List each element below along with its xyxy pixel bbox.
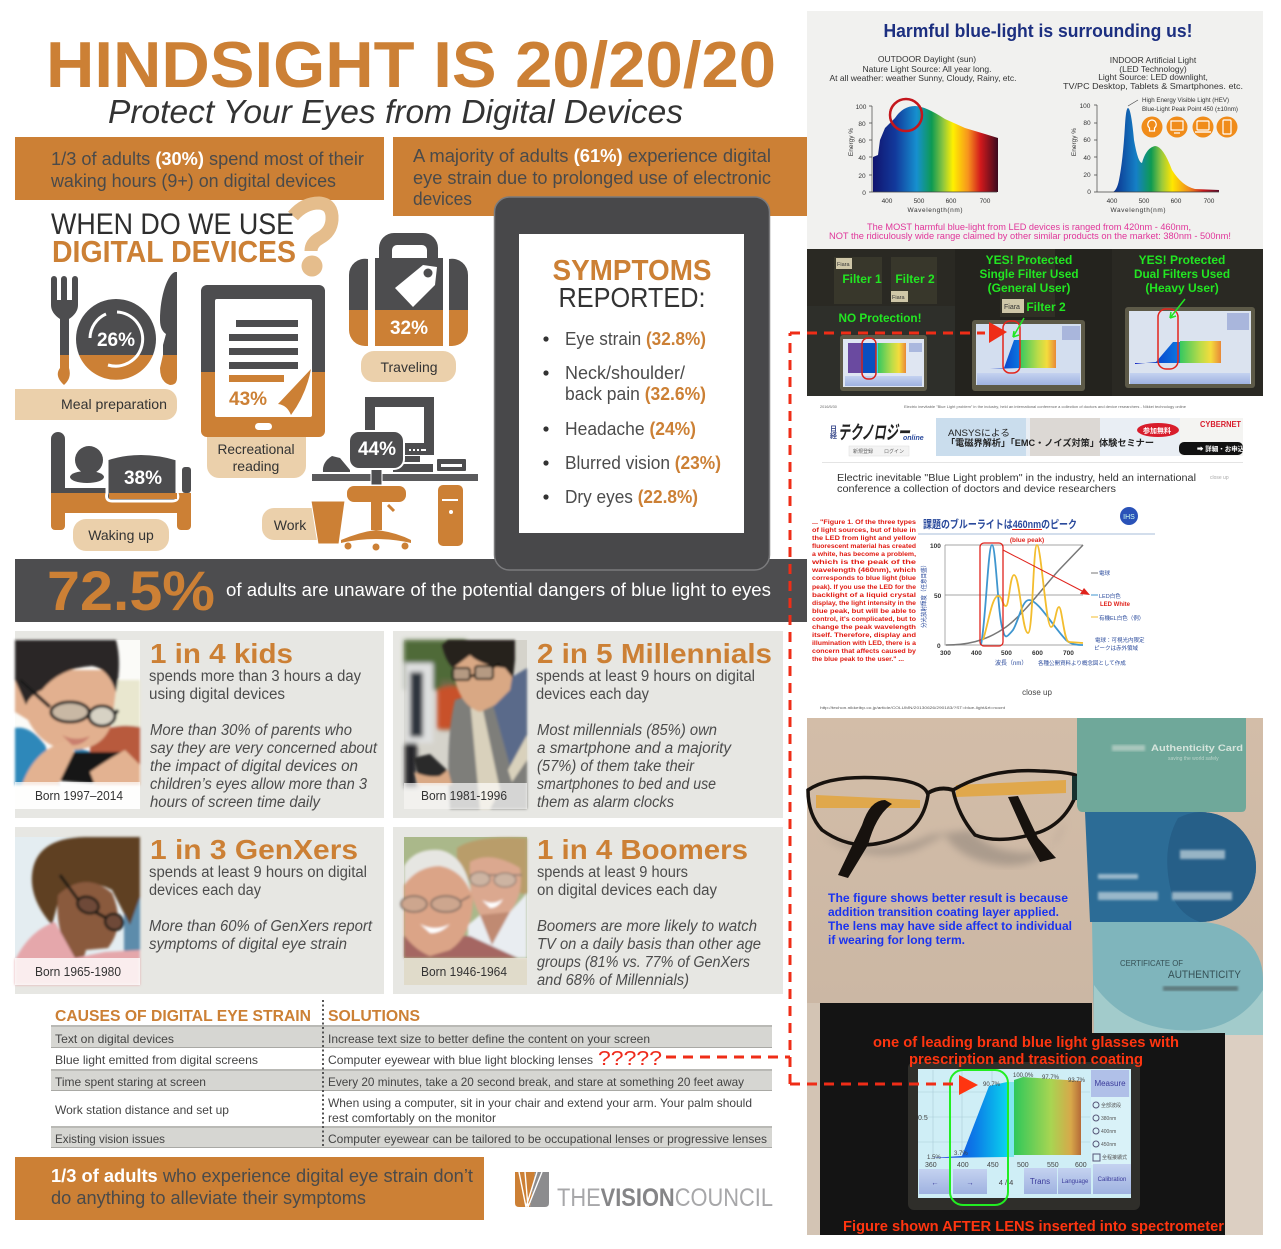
text: one of leading brand (873, 1035, 1179, 1068)
chart: indoor LED spectrum: High Energy Visible Light (HEV) (1142, 98, 1229, 104)
table: causes and solutions (51, 1000, 772, 1148)
text: boomers statistic: on digital devices each day (537, 882, 717, 899)
panel: 1 in 3 genxers (15, 827, 384, 994)
symptoms list: Eye strain (32.8%) (565, 329, 706, 349)
chart: indoor LED spectrum: 700 (1204, 198, 1215, 205)
text: boomers statistic: spends at least 9 hours (537, 864, 688, 881)
table rows text: Work station distance and set up (55, 1103, 229, 1117)
heading: 1 in 4 kids: 1 in 4 kids (150, 638, 293, 669)
photo: spectrometer device: 600 (1075, 1162, 1087, 1169)
photo: spectrometer device: Measure (1094, 1079, 1126, 1088)
photo: spectrometer device: 450nm (1101, 1142, 1116, 1148)
chart: indoor LED spectrum: 600 (1171, 198, 1182, 205)
heading: when do we use digital devices: WHEN DO WE USE (51, 208, 294, 241)
label: waking up: Waking up (88, 527, 154, 543)
stat banner: 61 percent of adults: A majority of adults (61%) experience digital (413, 146, 771, 166)
chart: indoor LED spectrum: 400 (1107, 198, 1118, 205)
text: indoor artificial light: (LED Technology) (1119, 64, 1187, 74)
article title: conference a collection of doctors and device researchers (837, 484, 1116, 495)
logo: nikkei technology online (830, 423, 924, 456)
logo: nikkei technology online: 新規登録 (853, 448, 873, 455)
chart: outdoor daylight spectrum: 60 (858, 138, 866, 145)
chart: outdoor daylight spectrum: 600 (946, 198, 957, 205)
text: single filter (980, 253, 1078, 314)
label: recreational reading: reading (233, 458, 279, 474)
caption: close up: close up (1022, 688, 1052, 697)
text: genxers statistic (149, 864, 373, 953)
stat banner: 61 percent of adults: eye strain due to prolonged use of electronic (413, 168, 771, 188)
icon: traveling suitcase 32 percent: 32% (390, 318, 428, 339)
text: red figure quote: which is the peak of the (811, 559, 916, 566)
article footer url: http://techon.nikkeibp.co.jp/article/COLUMN/20130626/290183/?ST=blue-light&rt=nocnt (820, 706, 1006, 710)
stat banner: 61 percent of adults: devices (413, 189, 472, 209)
question marks: ????? (598, 1048, 662, 1070)
article title: Electric inevitable "Blue Light problem" in the industry, held an international (837, 473, 1196, 484)
photo: spectrometer device: 400 (957, 1162, 969, 1169)
text: red figure quote: of light sources, but of blue in (812, 527, 916, 534)
chart: blue peak at 460nm: 課題のブルーライトは460nmのピーク (923, 517, 1077, 531)
photo: spectrometer device: 3.7% (954, 1151, 968, 1157)
text: red figure quote: change the peak wavelength (812, 624, 916, 631)
chart: indoor LED spectrum: Wavelength(nm) (1110, 207, 1166, 214)
chart: outdoor daylight spectrum: 500 (914, 198, 925, 205)
chart: blue peak at 460nm (918, 507, 1155, 667)
text: boomers statistic: Boomers are more likely to watch (537, 918, 757, 935)
panel: 1 in 4 boomers (393, 827, 783, 994)
label tags: Fiara (892, 295, 905, 301)
labels: filter 1, filter 2: NO Protection! (838, 311, 922, 325)
chart: blue peak at 460nm: LED White (1100, 602, 1131, 608)
text: single filter: YES! Protected (986, 253, 1072, 267)
logo: nikkei technology online: online (903, 435, 924, 442)
text: red figure quote: peak). If you use the LED for the (812, 584, 916, 591)
photo: spectrometer device: → (966, 1178, 974, 1187)
text: blue note on glasses: addition transition coating layer applied. (828, 905, 1059, 919)
table rows text: Computer eyewear with blue light blocking lenses (328, 1053, 593, 1067)
text: blue note on glasses: if wearing for long term. (828, 933, 965, 947)
icon: recreational reading tablet 43 percent: 43% (229, 389, 267, 410)
chart: blue peak at 460nm: 500 (1001, 650, 1012, 657)
symptoms heading: REPORTED: (558, 282, 706, 313)
text: genxers statistic: devices each day (149, 882, 261, 899)
text: boomers statistic: and 68% of Millennials) (537, 972, 689, 989)
table rows text: When using a computer, sit in your chair and extend your arm. Your palm should (328, 1096, 752, 1110)
table rows text: Text on digital devices (55, 1032, 174, 1046)
photo: spectrometer device (820, 1003, 1225, 1235)
label: recreational reading (207, 437, 306, 478)
ad banner (936, 418, 1245, 456)
chart: indoor LED spectrum: 20 (1083, 172, 1091, 179)
callout: 1/3 of adults: do anything to alleviate their symptoms (51, 1188, 366, 1208)
symptoms list: Dry eyes (22.8%) (565, 487, 698, 507)
text: boomers statistic: groups (81% vs. 77% of GenXers (537, 954, 750, 971)
photo: spectrometer device: 380nm (1101, 1116, 1116, 1122)
icon: meal preparation plate 26 percent (51, 272, 177, 385)
logo: nikkei technology online: ログイン (884, 448, 904, 455)
photo: spectrometer device: 550 (1047, 1162, 1059, 1169)
caption: born 1946-1964: Born 1946-1964 (421, 964, 507, 979)
heading: 1 in 4 boomers: 1 in 4 Boomers (537, 834, 748, 865)
text: dual filters (1134, 253, 1230, 295)
text: most harmful blue light note: The MOST harmful blue-light from LED devices is ranged from 420nm - 460nm, (867, 222, 1191, 232)
text: red figure quote: concern that affects caused by (812, 648, 916, 655)
chart: outdoor daylight spectrum: 700 (980, 198, 991, 205)
photo: older couple smiling (401, 837, 527, 985)
logo: the vision council (515, 1172, 773, 1212)
ad banner: ➡ 詳細・お申込 (1197, 444, 1245, 453)
chart: blue peak at 460nm: LED白色 (1099, 592, 1121, 600)
card: certificate of authenticity: CERTIFICATE OF (1120, 958, 1183, 968)
text: red figure quote: the LED from light and yellow (812, 535, 917, 542)
chart: outdoor daylight spectrum: 20 (858, 173, 866, 180)
photo: spectrometer device: 90.7% (983, 1082, 1001, 1088)
text: kids statistic: say they are very concerned about (150, 740, 378, 757)
label: waking up (73, 519, 169, 551)
panel: harmful blue light (807, 11, 1263, 249)
panel: filter spectrometer photos (807, 249, 1263, 396)
text: red figure quote: control, it's complicated, but to (812, 616, 916, 623)
label: recreational reading: Recreational (218, 441, 294, 457)
label: meal preparation: Meal preparation (61, 396, 167, 412)
text: boomers statistic (537, 864, 761, 989)
photo: spectrometer device: 4 / 4 (999, 1178, 1013, 1187)
chart: blue peak at 460nm: 700 (1063, 650, 1074, 657)
text: kids statistic: More than 30% of parents who (150, 722, 352, 739)
text: red figure quote: display, the light intensity in the (812, 600, 916, 607)
text: millennials statistic: them as alarm clocks (537, 794, 674, 811)
chart: indoor LED spectrum: 100 (1080, 103, 1091, 110)
heading: when do we use digital devices: DIGITAL DEVICES (52, 234, 296, 269)
logo: nikkei technology online: テクノロジー (838, 423, 911, 444)
text: millennials statistic (536, 668, 755, 811)
chart: blue peak at 460nm: 0 (937, 643, 941, 650)
text: indoor artificial light: INDOOR Artificial Light (1110, 55, 1197, 65)
text: indoor artificial light (1063, 55, 1243, 91)
text: red figure quote: a white, has become a problem, (812, 551, 916, 558)
label: work: Work (274, 517, 307, 533)
text: most harmful blue light note (829, 222, 1231, 241)
text: millennials statistic: (57%) of them take their (537, 758, 695, 775)
panel: glasses and authenticity cards photo (807, 718, 1263, 1235)
chart: indoor LED spectrum: Blue-Light Peak Point 450 (±10nm) (1142, 107, 1238, 113)
icon: recreational reading tablet 43 percent (201, 285, 325, 437)
text: kids statistic: using digital devices (149, 686, 285, 703)
icon: waking up bed 38 percent (51, 432, 191, 530)
caption: born 1965-1980: Born 1965-1980 (35, 964, 121, 979)
text: outdoor daylight: OUTDOOR Daylight (sun) (878, 54, 976, 64)
icons: light sources (1142, 116, 1238, 138)
chart: blue peak at 460nm: 100 (930, 543, 941, 550)
heading: when do we use digital devices (51, 208, 296, 269)
labels: filter 1, filter 2: Filter 2 (895, 272, 935, 286)
table rows text: Blue light emitted from digital screens (55, 1053, 258, 1067)
ad banner: 参加無料 (1143, 426, 1171, 435)
label tags: Fiara (837, 262, 850, 268)
label: work (262, 508, 320, 540)
screen: no protection (840, 335, 927, 391)
icon: meal preparation plate 26 percent: 26% (97, 330, 135, 351)
screen: dual filters (1125, 299, 1255, 388)
chart: outdoor daylight spectrum: Energy % (848, 128, 855, 156)
labels: filter 1, filter 2: Filter 1 (842, 272, 882, 286)
arrow: red dashed connector (666, 322, 1007, 1095)
logo: nikkei technology online: 経 (830, 431, 837, 440)
photo: boy with glasses and phone (15, 640, 140, 809)
symptoms list: Neck/shoulder/ (565, 363, 685, 383)
caption: born 1997-2014: Born 1997–2014 (35, 788, 123, 803)
chart: blue peak at 460nm: 有機EL白色（例） (1099, 614, 1144, 622)
chart: indoor LED spectrum: 80 (1083, 120, 1091, 127)
photo: woman with curly hair and glasses (15, 837, 140, 985)
text: dual filters: (Heavy User) (1145, 281, 1219, 295)
chart: outdoor daylight spectrum: 40 (858, 155, 866, 162)
chart: blue peak at 460nm: 600 (1032, 650, 1043, 657)
chart: blue peak at 460nm: 波長（nm） (995, 659, 1027, 667)
photo: glasses (808, 771, 1082, 878)
chart: blue peak at 460nm: 電球 (1099, 569, 1111, 577)
symptoms list: Blurred vision (23%) (565, 453, 721, 473)
text: genxers statistic: spends at least 9 hours on digital (149, 864, 367, 881)
text: single filter: (General User) (988, 281, 1070, 295)
chart: blue peak at 460nm: 300 (940, 650, 951, 657)
card: authenticity card (1077, 718, 1246, 812)
icon: work desk computer 44 percent (311, 397, 478, 550)
icon: traveling suitcase 32 percent (349, 233, 468, 346)
ad banner: CYBERNET (1200, 420, 1241, 429)
photo: spectrometer device: 1.5% (927, 1155, 941, 1161)
text: one of leading brand: prescription and trasition coating (909, 1052, 1143, 1068)
chart: outdoor daylight spectrum: 100 (856, 104, 867, 111)
text: kids statistic: children’s eyes allow more than 3 (150, 776, 367, 793)
chart: blue peak at 460nm: ピークは赤外領域 (1094, 644, 1139, 652)
ad banner: ANSYSによる (948, 428, 1010, 438)
heading: harmful blue-light: Harmful blue-light is surrounding us! (884, 21, 1192, 41)
text: dual filters: Dual Filters Used (1134, 267, 1230, 281)
chart: blue peak at 460nm: (blue peak) (1010, 537, 1044, 544)
text: most harmful blue light note: NOT the ridiculously wide range claimed by other similar products on the market: 380nm - 500nm! (829, 231, 1231, 241)
table rows text: rest comfortably on the monitor (328, 1111, 496, 1125)
chart: indoor LED spectrum: 60 (1083, 137, 1091, 144)
photo: spectrometer device: Trans (1030, 1177, 1050, 1186)
photo: spectrometer device: ← (931, 1178, 939, 1187)
label tags: Fiara (1004, 304, 1020, 311)
text: millennials statistic: Most millennials (85%) own (537, 722, 717, 739)
text: kids statistic: the impact of digital devices on (150, 758, 358, 775)
icon: work desk computer 44 percent: 44% (358, 439, 396, 460)
icon: question mark (293, 203, 332, 276)
photo: young man with glasses using phone (404, 640, 527, 809)
chart: blue peak at 460nm: 50 (934, 593, 942, 600)
label: traveling: Traveling (380, 359, 438, 375)
article title: close up (1210, 475, 1229, 481)
text: single filter: Single Filter Used (980, 267, 1078, 281)
table rows text: Time spent staring at screen (55, 1075, 206, 1089)
article page header: Electric inevitable "Blue Light problem" in the industry, held an international conference a collection of doctors and device researchers - Nikkei technology online (904, 405, 1186, 409)
banner: 72.5 percent unaware: 72.5% (47, 559, 215, 622)
chart: indoor LED spectrum: 40 (1083, 155, 1091, 162)
heading: 2 in 5 millennials: 2 in 5 Millennials (537, 638, 772, 669)
text: outdoor daylight (830, 54, 1016, 83)
text: red figure quote: itself. Therefore, display and (812, 632, 916, 639)
stat banner: 61 percent of adults (393, 137, 807, 216)
text: red figure quote: corresponds to blue light (blue (812, 575, 916, 582)
text: red figure quote: backlight of a liquid crystal (812, 592, 916, 599)
chart: blue peak at 460nm: 400 (971, 650, 982, 657)
text: red figure quote: the blue peak to the user." ... (812, 656, 904, 663)
text: red figure quote: fluorescent material has created (812, 543, 916, 550)
photo: spectrometer device: 全程接續式 (1102, 1154, 1127, 1161)
photo: spectrometer device: 全部波段 (1101, 1102, 1121, 1109)
text: red figure quote: ... "Figure 1. Of the three types (812, 519, 916, 526)
card: authenticity card: Authenticity Card (1151, 743, 1243, 753)
table rows text: Increase text size to better define the content on your screen (328, 1032, 650, 1046)
labels: filter 1, filter 2 (838, 272, 935, 325)
text: indoor artificial light: TV/PC Desktop, Tablets & Smartphones. etc. (1063, 81, 1243, 91)
text: one of leading brand: one of leading brand blue light glasses with (873, 1035, 1179, 1051)
photo: spectrometer device: 100.0% (1013, 1073, 1034, 1079)
text: millennials statistic: spends at least 9 hours on digital (536, 668, 755, 685)
glasses shadow (820, 820, 1066, 865)
ad banner: 「電磁界解析」「EMC・ノイズ対策」体験セミナー (946, 437, 1154, 448)
table header: solutions: SOLUTIONS (328, 1008, 420, 1025)
caption: born 1981-1996: Born 1981-1996 (421, 788, 507, 803)
card: certificate of authenticity (1092, 922, 1263, 1035)
text: figure shown after lens: Figure shown AFTER LENS inserted into spectrometer (843, 1219, 1224, 1235)
text: blue note on glasses: The lens may have side affect to individual (828, 919, 1072, 933)
subtitle: Protect Your Eyes from Digital Devices (108, 93, 683, 130)
chart: indoor LED spectrum: 500 (1139, 198, 1150, 205)
text: genxers statistic: symptoms of digital eye strain (149, 936, 347, 953)
photo: spectrometer device: 450 (987, 1162, 999, 1169)
article page header: 2016/5/30 (820, 405, 837, 409)
text: blue note on glasses: The figure shows better result is because (828, 891, 1068, 905)
photo: spectrometer device: 500 (1017, 1162, 1029, 1169)
chart: indoor LED spectrum: Energy % (1071, 128, 1078, 156)
text: outdoor daylight: At all weather: weather Sunny, Cloudy, Rainy, etc. (830, 73, 1016, 83)
symptoms list: back pain (32.6%) (565, 384, 706, 404)
text: single filter: Filter 2 (1026, 300, 1066, 314)
symptoms heading: SYMPTOMS (552, 255, 712, 287)
text: red figure quote: illumination with LED, there is a (812, 640, 916, 647)
article title (837, 473, 1229, 495)
title: HINDSIGHT IS 20/20/20 (46, 28, 776, 101)
chart: indoor LED spectrum (1071, 98, 1238, 214)
text: kids statistic (149, 668, 378, 811)
table rows text: Existing vision issues (55, 1132, 165, 1146)
banner: 72.5 percent unaware: of adults are unaware of the potential dangers of blue light to eyes (226, 580, 771, 600)
text: millennials statistic: a smartphone and a majority (537, 740, 732, 757)
chart: outdoor daylight spectrum: 400 (882, 198, 893, 205)
table rows text: Every 20 minutes, take a 20 second break, and stare at something 20 feet away (328, 1075, 744, 1089)
symptoms list: Headache (24%) (565, 419, 696, 439)
photo: spectrometer device: 360 (925, 1162, 937, 1169)
text: outdoor daylight: Nature Light Source: All year long. (862, 64, 992, 74)
panel: symptoms tablet (494, 197, 770, 570)
panel: article printout (807, 396, 1263, 718)
text: red figure quote: blue peak, but will be able to (812, 608, 916, 615)
callout: 1/3 of adults (15, 1157, 484, 1220)
banner: 72.5 percent unaware (15, 559, 807, 622)
panel: 1 in 4 kids (15, 631, 384, 818)
text: boomers statistic: TV on a daily basis than other age (537, 936, 761, 953)
chart: blue peak at 460nm: 分光放射輝度（任意目盛） (920, 562, 928, 628)
text: red figure quote: wavelength (460nm), which (811, 567, 916, 574)
card: certificate of authenticity: AUTHENTICITY (1168, 969, 1242, 981)
card: authenticity card: saving the world safely (1168, 756, 1219, 762)
chart: outdoor daylight spectrum: 0 (862, 190, 866, 197)
logo: nikkei technology online: 日 (830, 425, 837, 433)
chart: outdoor daylight spectrum: Wavelength(nm) (908, 207, 962, 214)
text: kids statistic: spends more than 3 hours a day (149, 668, 361, 685)
text: millennials statistic: smartphones to bed and use (537, 776, 716, 793)
text: indoor artificial light: Light Source: LED downlight, (1098, 72, 1208, 82)
label tags (836, 258, 1024, 313)
photo: spectrometer device: 97.7% (1042, 1075, 1060, 1081)
text: genxers statistic: More than 60% of GenXers report (149, 918, 373, 935)
symptoms list (543, 329, 721, 507)
card: blue card (1085, 812, 1256, 922)
heading: 1 in 3 genxers: 1 in 3 GenXers (150, 834, 358, 865)
chart: blue peak at 460nm: 電球：可視光内限定 (1095, 636, 1145, 644)
stat banner: 30 percent of adults (15, 137, 384, 200)
photo: spectrometer device: 0.5 (918, 1115, 928, 1122)
table rows text: Computer eyewear can be tailored to be occupational lenses or progressive lenses (328, 1132, 767, 1146)
table rows text (55, 1032, 767, 1146)
text: dual filters: YES! Protected (1139, 253, 1225, 267)
text: red figure quote (811, 519, 917, 663)
chart: blue peak at 460nm: IHS (1123, 514, 1135, 521)
label: meal preparation (15, 389, 177, 420)
photo: spectrometer device: Language (1062, 1179, 1089, 1185)
screen: single filter (972, 318, 1085, 391)
panel: 2 in 5 millennials (393, 631, 783, 818)
text: blue note on glasses (828, 891, 1072, 947)
photo: spectrometer device: Calibration (1098, 1177, 1126, 1183)
chart: outdoor daylight spectrum (848, 99, 998, 214)
chart: indoor LED spectrum: 0 (1087, 189, 1091, 196)
chart: outdoor daylight spectrum: 80 (858, 121, 866, 128)
table header: causes: CAUSES OF DIGITAL EYE STRAIN (55, 1008, 311, 1025)
chart: blue peak at 460nm: 各種公開資料より概念図として作成 (1038, 659, 1126, 667)
logo: the vision council: THEVISIONCOUNCIL (557, 1184, 773, 1212)
text: kids statistic: hours of screen time daily (150, 794, 321, 811)
label: traveling (361, 351, 456, 382)
text: millennials statistic: devices each day (536, 686, 649, 703)
photo: spectrometer device: 400nm (1101, 1129, 1116, 1135)
stat banner: 30 percent of adults: waking hours (9+) on digital devices (50, 171, 336, 191)
photo: spectrometer device: 93.7% (1068, 1078, 1086, 1084)
callout: 1/3 of adults: 1/3 of adults who experience digital eye strain don’t (51, 1166, 473, 1186)
icon: waking up bed 38 percent: 38% (124, 468, 162, 489)
stat banner: 30 percent of adults: 1/3 of adults (30%) spend most of their (51, 149, 364, 169)
symptoms heading (552, 255, 712, 313)
